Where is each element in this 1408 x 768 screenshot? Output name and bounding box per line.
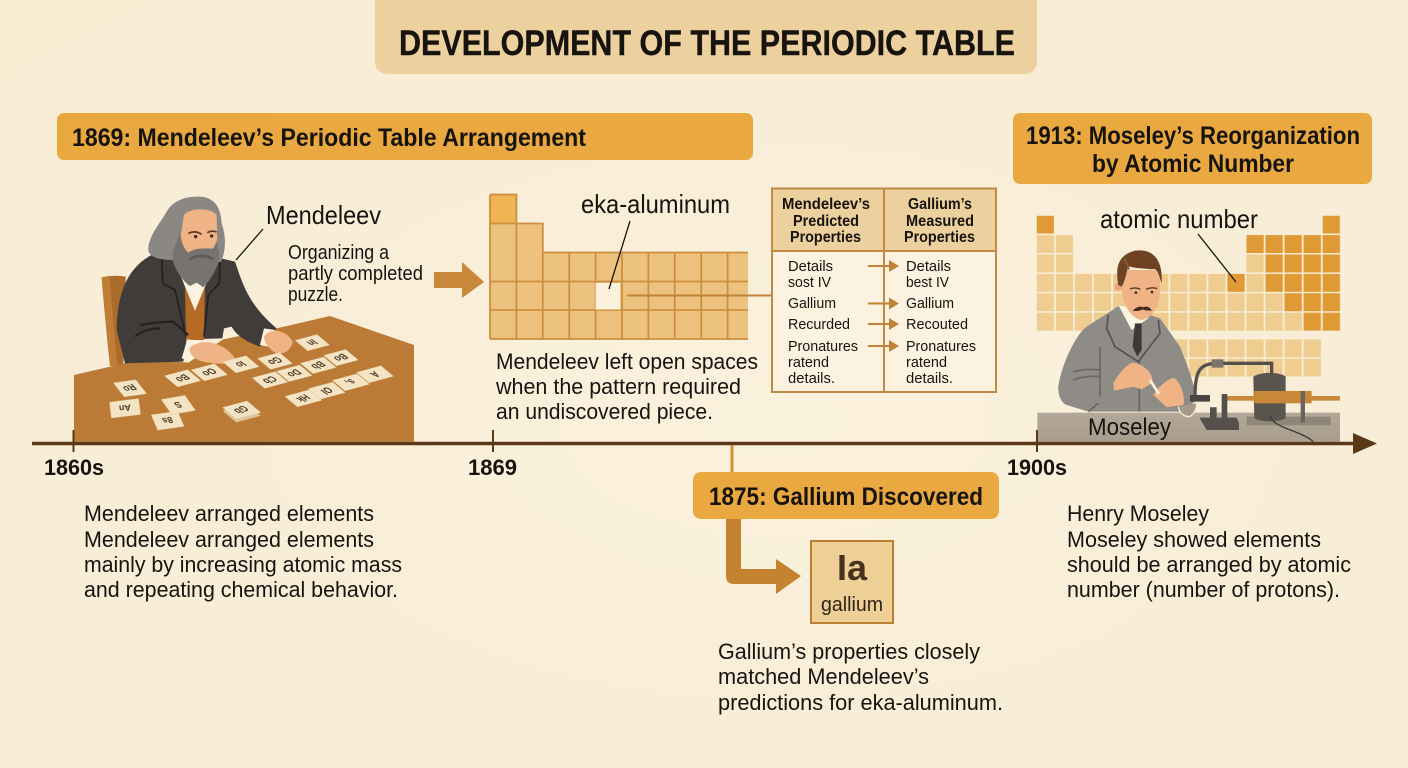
table header: measured: Gallium’s — [908, 196, 972, 213]
illustration: Mendeleev at desk sorting cards — [74, 197, 414, 442]
label: Mendeleev with leader line — [236, 200, 381, 260]
table header: measured — [904, 196, 975, 246]
heading: 1913 Moseley: 1913: Moseley’s Reorganization — [1026, 122, 1360, 150]
measured column: Details — [906, 258, 951, 275]
table header: predicted: Predicted — [793, 213, 859, 230]
measured column — [906, 258, 976, 387]
text: open spaces note: Mendeleev left open spaces — [496, 349, 758, 374]
date: 1869: 1869 — [468, 455, 517, 480]
arrow: 1875 to gallium cell — [726, 518, 801, 594]
label: Moseley: Moseley — [1088, 414, 1171, 441]
arrow: puzzle to grid — [434, 262, 484, 298]
predicted column: details. — [788, 370, 835, 387]
cards on desk: 8s — [161, 415, 174, 426]
predicted column: sost IV — [788, 274, 831, 291]
label: eka-aluminum with leader line: eka-aluminum — [581, 189, 730, 219]
text: open spaces note: an undiscovered piece. — [496, 399, 713, 424]
cards on desk: S — [171, 399, 184, 409]
row arrows — [868, 260, 899, 352]
measured column: best IV — [906, 274, 949, 291]
text: gallium match: predictions for eka-aluminum. — [718, 690, 1003, 715]
cards on desk: Hk — [292, 392, 312, 404]
label: atomic number with leader line: atomic number — [1100, 204, 1258, 234]
text: puzzle caption: Organizing a — [288, 242, 390, 264]
predicted column: ratend — [788, 354, 829, 371]
text: Henry Moseley: number (number of protons). — [1067, 577, 1340, 602]
cards on desk: Oo — [198, 366, 219, 378]
heading: 1875 Gallium Discovered — [693, 472, 999, 519]
text: gallium match — [718, 639, 1003, 715]
illustration: Moseley with laboratory apparatus — [1037, 250, 1340, 442]
heading: 1913 Moseley — [1013, 113, 1372, 184]
text: gallium match: Gallium’s properties closely — [718, 639, 981, 664]
text: Henry Moseley: should be arranged by atomic — [1067, 552, 1351, 577]
heading: 1913 Moseley: by Atomic Number — [1092, 150, 1294, 178]
connector: grid to comparison table — [627, 294, 772, 296]
predicted column: Recurded — [788, 316, 850, 333]
text: Mendeleev arrangement: mainly by increasing atomic mass — [84, 552, 402, 577]
cards on desk: Gb — [230, 403, 251, 415]
cards on desk: s, — [342, 377, 358, 387]
comparison table — [772, 188, 996, 392]
table header: measured: Properties — [904, 229, 975, 246]
cards on desk: Cb — [259, 373, 279, 385]
connector: timeline to 1875 — [730, 445, 734, 473]
predicted column — [788, 258, 858, 387]
text: puzzle caption: puzzle. — [288, 284, 343, 306]
text: Mendeleev arrangement: Mendeleev arranged elements — [84, 527, 374, 552]
cards on desk: Bb — [307, 359, 328, 371]
label: atomic number with leader line — [1100, 204, 1258, 282]
table header: measured: Measured — [906, 213, 974, 230]
cards on desk: A — [366, 369, 382, 379]
label: Mendeleev with leader line: Mendeleev — [266, 200, 381, 230]
open space cell — [596, 283, 620, 310]
measured column: Gallium — [906, 295, 954, 312]
text: Mendeleev arrangement: and repeating chemical behavior. — [84, 577, 398, 602]
measured column: Pronatures — [906, 338, 976, 355]
text: puzzle caption: partly completed — [288, 263, 423, 285]
text: Mendeleev arrangement — [84, 501, 402, 602]
chart: full periodic table behind Moseley — [1037, 216, 1341, 377]
cards on desk: Ol — [317, 385, 335, 396]
date: 1860s: 1860s — [44, 455, 104, 480]
text: puzzle caption — [288, 242, 423, 306]
text: Mendeleev arrangement: Mendeleev arranged elements — [84, 501, 374, 526]
heading: 1875 Gallium Discovered: 1875: Gallium Discovered — [709, 483, 983, 511]
predicted column: Pronatures — [788, 338, 858, 355]
table header: predicted: Mendeleev’s — [782, 196, 870, 213]
cards on desk — [109, 334, 393, 430]
cards on desk: Ro — [120, 381, 139, 394]
measured column: Recouted — [906, 316, 968, 333]
cards on desk: Do — [283, 367, 304, 379]
cards on desk: Bo — [330, 351, 350, 363]
title: DEVELOPMENT OF THE PERIODIC TABLE — [399, 23, 1015, 63]
gallium element cell — [811, 541, 893, 623]
cards on desk: In — [303, 337, 320, 347]
table header: predicted: Properties — [790, 229, 861, 246]
title — [375, 0, 1037, 74]
cards on desk: Go — [264, 354, 284, 366]
heading: 1869 Mendeleev: 1869: Mendeleev’s Periodic Table Arrangement — [72, 124, 587, 152]
gallium element cell: Ia — [837, 547, 868, 588]
date: 1900s: 1900s — [1007, 455, 1067, 480]
gallium element cell: gallium — [821, 594, 883, 616]
text: open spaces note: when the pattern required — [495, 374, 741, 399]
measured column: ratend — [906, 354, 947, 371]
cards on desk: Bo — [172, 372, 192, 384]
text: gallium match: matched Mendeleev’s — [718, 664, 929, 689]
heading: 1869 Mendeleev — [57, 113, 753, 160]
predicted column: Details — [788, 258, 833, 275]
text: open spaces note — [495, 349, 758, 424]
text: Henry Moseley: Henry Moseley — [1067, 501, 1210, 526]
timeline arrow with ticks — [32, 430, 1377, 454]
measured column: details. — [906, 370, 953, 387]
predicted column: Gallium — [788, 295, 836, 312]
label: eka-aluminum with leader line — [581, 189, 730, 289]
cards on desk: Io — [232, 359, 249, 369]
text: Henry Moseley — [1067, 501, 1351, 602]
table header: predicted — [782, 196, 870, 246]
chart: partial periodic grid with open space — [490, 194, 748, 339]
text: Henry Moseley: Moseley showed elements — [1067, 527, 1321, 552]
cards on desk: An — [118, 402, 132, 414]
